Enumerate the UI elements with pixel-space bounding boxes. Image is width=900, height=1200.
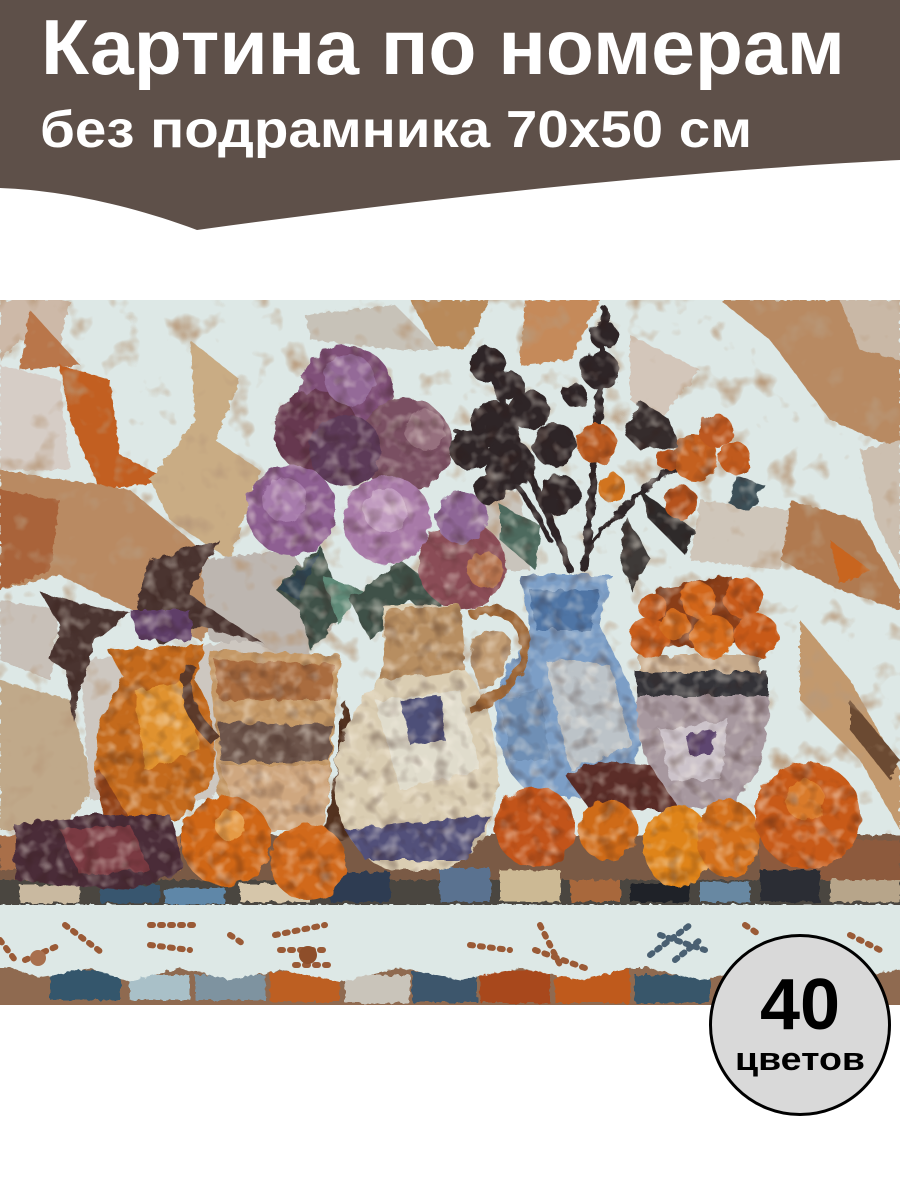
lace: large brown motif (299, 946, 317, 964)
painting (0, 290, 900, 1015)
painting: lace tablecloth (0, 905, 900, 1015)
painting: ceramic bowl with oranges (630, 575, 778, 808)
badge label: цветов (735, 1041, 865, 1077)
badge number: 40 (760, 965, 840, 1045)
painting: wall background (0, 300, 900, 836)
painting: dark foliage and orange berries (450, 310, 765, 592)
painting: blue vase (495, 575, 640, 798)
title: Картина по номерам (41, 3, 845, 91)
painting: fruit on table (15, 760, 861, 900)
painting: patterned white jug (325, 605, 526, 870)
painting: orange jug and leaves (40, 540, 265, 820)
badge circle (710, 936, 890, 1114)
subtitle: без подрамника 70х50 см (40, 101, 752, 159)
painting: hydrangea flowers (246, 345, 506, 650)
painting: wall mottling (0, 300, 900, 840)
header banner (0, 0, 900, 230)
badge: 40 colours (710, 936, 890, 1114)
painting: brown jug (187, 650, 340, 830)
painting: table and checked cloth (0, 835, 900, 905)
